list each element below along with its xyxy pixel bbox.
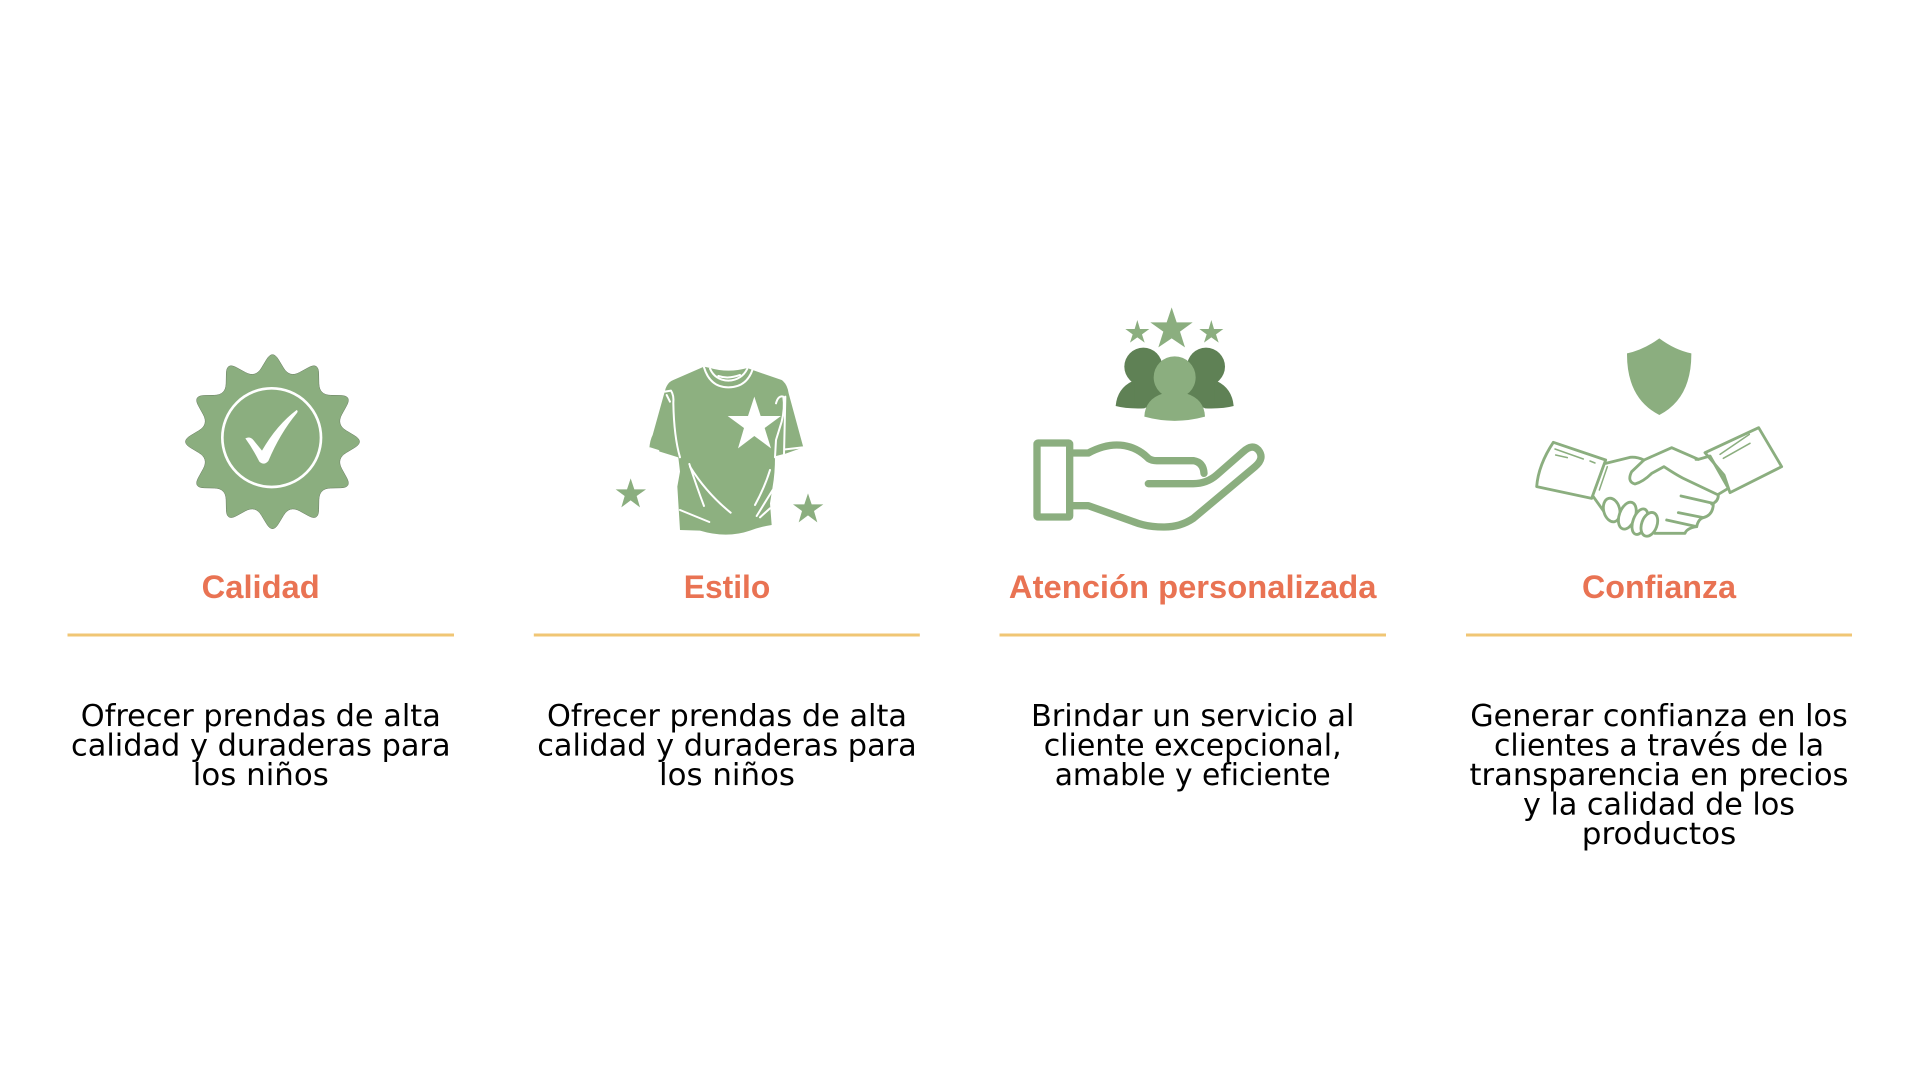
panel: Confianza: [1466, 338, 1852, 852]
text: Confianza description: clientes a través de la: [1494, 728, 1824, 764]
text: Confianza description: [1470, 699, 1848, 852]
heading: Calidad: Calidad: [202, 569, 320, 605]
text: Estilo description: los niños: [659, 758, 795, 793]
text: Confianza description: y la calidad de los: [1523, 788, 1795, 822]
text: Confianza description: Generar confianza en los: [1470, 699, 1848, 734]
text: Calidad description: Ofrecer prendas de alta: [81, 699, 441, 734]
panel: Estilo: [534, 367, 920, 793]
text: Calidad description: calidad y duraderas para: [71, 728, 451, 764]
icon: open hand with customers and stars: [1037, 307, 1261, 527]
icon: quality badge: [185, 355, 360, 529]
divider: [1466, 634, 1852, 636]
panel: Calidad: [68, 355, 454, 793]
divider: [1000, 634, 1386, 636]
heading: Estilo: Estilo: [684, 569, 770, 605]
text: Calidad description: los niños: [193, 758, 329, 793]
text: Estilo description: Ofrecer prendas de alta: [547, 699, 907, 734]
text: Atención description: [1031, 699, 1354, 793]
heading: Atención personalizada: Atención personalizada: [1009, 569, 1377, 605]
divider: [534, 634, 920, 636]
icon: t-shirt with stars: [616, 367, 823, 535]
text: Atención description: cliente excepcional,: [1044, 728, 1342, 764]
text: Calidad description: [71, 699, 451, 793]
text: Atención description: Brindar un servicio al: [1031, 699, 1354, 734]
divider: [68, 634, 454, 636]
text: Confianza description: transparencia en precios: [1470, 758, 1848, 793]
text: Atención description: amable y eficiente: [1055, 758, 1331, 793]
text: Confianza description: productos: [1582, 817, 1736, 852]
heading: Confianza: Confianza: [1582, 569, 1736, 605]
icon: shield and handshake: [1537, 338, 1782, 539]
text: Estilo description: calidad y duraderas para: [537, 728, 917, 764]
panel: Atención personalizada: [1000, 307, 1386, 793]
text: Estilo description: [537, 699, 917, 793]
